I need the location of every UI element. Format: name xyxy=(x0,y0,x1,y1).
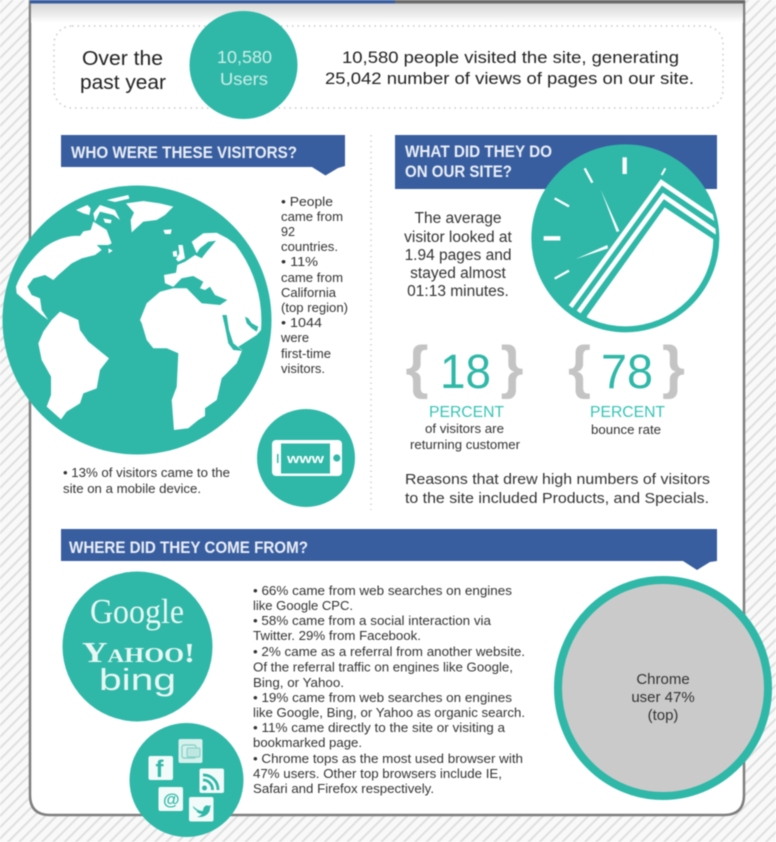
icon: social media circle xyxy=(130,723,244,837)
text: summary sentence xyxy=(325,48,694,88)
icon: rss xyxy=(200,768,224,793)
heading: what did they do on our site xyxy=(395,135,717,189)
text: visitor facts: • People xyxy=(281,195,333,209)
panel: summary dotted box xyxy=(54,26,723,108)
heading: where did they come from: WHERE DID THEY COME FROM? xyxy=(69,538,308,557)
text: traffic sources list: • 58% came from a social interaction via xyxy=(253,614,491,628)
icon: globe xyxy=(2,186,272,454)
land: North America xyxy=(16,195,129,320)
text: visitor facts: California xyxy=(281,286,336,300)
text: visitor facts xyxy=(280,195,348,376)
text: traffic sources list: • 2% came as a referral from another website. xyxy=(253,645,525,659)
text: reasons xyxy=(405,472,710,507)
circle: 10,580 users xyxy=(190,11,298,119)
text: traffic sources list: Twitter. 29% from Facebook. xyxy=(253,629,421,643)
heading: what did they do on our site: WHAT DID THEY DO xyxy=(405,142,552,161)
icon: search engines circle: YAHOO ! xyxy=(82,637,195,669)
icon: twitter xyxy=(189,797,214,822)
text: mobile visitors: • 13% of visitors came to the xyxy=(63,466,230,480)
text: traffic sources list: Safari and Firefox respectively. xyxy=(253,782,434,796)
text: visitor facts: visitors. xyxy=(281,362,325,376)
circle: chrome browser share xyxy=(558,580,768,796)
icon: mobile phone www xyxy=(257,409,355,507)
stat: 18 percent returning: PERCENT xyxy=(429,404,504,421)
circle: chrome browser share: user 47% xyxy=(631,689,695,706)
text: over the past year xyxy=(80,48,166,94)
heading: what did they do on our site: ON OUR SITE? xyxy=(405,162,512,181)
land: Iceland and Britain xyxy=(163,229,185,262)
text: traffic sources list: bookmarked page. xyxy=(253,736,362,750)
circle: 10,580 users: Users xyxy=(220,69,268,89)
text: traffic sources list: Bing, or Yahoo. xyxy=(253,676,344,690)
stat: 78 percent bounce rate: bounce rate xyxy=(591,422,661,437)
text: visitor facts: first-time xyxy=(281,347,331,361)
stat: 18 percent returning: of visitors are xyxy=(425,421,504,436)
stat: 18 percent returning: 18 xyxy=(440,346,491,399)
stat: 78 percent bounce rate: PERCENT xyxy=(590,404,665,421)
text: average visitor: stayed almost xyxy=(410,265,506,282)
text: visitor facts: countries. xyxy=(281,240,338,254)
icon: mobile phone www: www xyxy=(286,451,325,466)
icon: search engines circle xyxy=(62,572,212,722)
text: visitor facts: came from xyxy=(281,210,343,224)
text: visitor facts: • 1044 xyxy=(281,316,322,330)
circle: chrome browser share: (top) xyxy=(648,707,678,724)
icon: search engines circle: bing xyxy=(99,662,176,697)
icon: search engines circle: Google xyxy=(90,592,184,631)
text: mobile visitors: site on a mobile device. xyxy=(63,482,201,496)
text: reasons: to the site included Products, and Specials. xyxy=(405,491,709,507)
text: visitor facts: 92 xyxy=(281,225,295,239)
text: summary sentence: 25,042 number of views of pages on our site. xyxy=(325,69,694,88)
text: reasons: Reasons that drew high numbers of visitors xyxy=(405,472,710,488)
stat: 18 percent returning xyxy=(406,335,524,452)
stat: 18 percent returning: { xyxy=(406,335,428,400)
stat: 78 percent bounce rate: } xyxy=(662,335,685,400)
land: Greenland xyxy=(126,201,173,232)
land: Eurasia and Africa xyxy=(140,233,261,430)
text: traffic sources list: like Google CPC. xyxy=(253,599,353,613)
text: traffic sources list: • 66% came from web searches on engines xyxy=(253,584,512,598)
text: visitor facts: (top region) xyxy=(281,301,348,315)
text: traffic sources list: like Google, Bing, or Yahoo as organic search. xyxy=(253,706,525,720)
text: average visitor xyxy=(404,210,513,300)
text: summary sentence: 10,580 people visited the site, generating xyxy=(342,48,679,67)
text: visitor facts: • 11% xyxy=(281,255,318,269)
text: traffic sources list: Of the referral traffic on engines like Google, xyxy=(253,660,513,674)
stat: 78 percent bounce rate: 78 xyxy=(601,346,653,399)
text: traffic sources list: • 11% came directly to the site or visiting a xyxy=(253,721,505,735)
text: visitor facts: were xyxy=(280,331,309,345)
text: traffic sources list: • Chrome tops as the most used browser with xyxy=(253,752,523,766)
heading: who were these visitors xyxy=(61,135,345,176)
sea: Red Sea and Persian Gulf xyxy=(222,315,258,351)
icon: chat xyxy=(178,739,202,763)
stat: 78 percent bounce rate xyxy=(568,335,685,437)
stat: 18 percent returning: } xyxy=(500,335,524,400)
text: traffic sources list: • 19% came from web searches on engines xyxy=(253,691,512,705)
stat: 18 percent returning: returning customer xyxy=(410,437,521,452)
text: average visitor: 01:13 minutes. xyxy=(407,283,509,300)
text: traffic sources list xyxy=(253,584,525,796)
text: visitor facts: came from xyxy=(281,271,343,285)
text: over the past year: past year xyxy=(80,72,166,94)
heading: who were these visitors: WHO WERE THESE VISITORS? xyxy=(71,143,297,162)
text: average visitor: The average xyxy=(414,210,502,227)
text: over the past year: Over the xyxy=(82,48,163,70)
heading: where did they come from xyxy=(61,529,717,570)
land: South America xyxy=(38,312,109,419)
text: mobile visitors xyxy=(63,466,230,496)
circle: 10,580 users: 10,580 xyxy=(217,47,272,67)
text: average visitor: 1.94 pages and xyxy=(405,247,511,264)
icon: clock chart xyxy=(531,144,725,337)
icon: email at: @ xyxy=(163,790,180,809)
icon: facebook: f xyxy=(156,756,164,783)
circle: chrome browser share: Chrome xyxy=(636,671,690,688)
stat: 78 percent bounce rate: { xyxy=(568,335,591,400)
text: average visitor: visitor looked at xyxy=(404,229,513,246)
text: traffic sources list: 47% users. Other top browsers include IE, xyxy=(253,767,502,781)
